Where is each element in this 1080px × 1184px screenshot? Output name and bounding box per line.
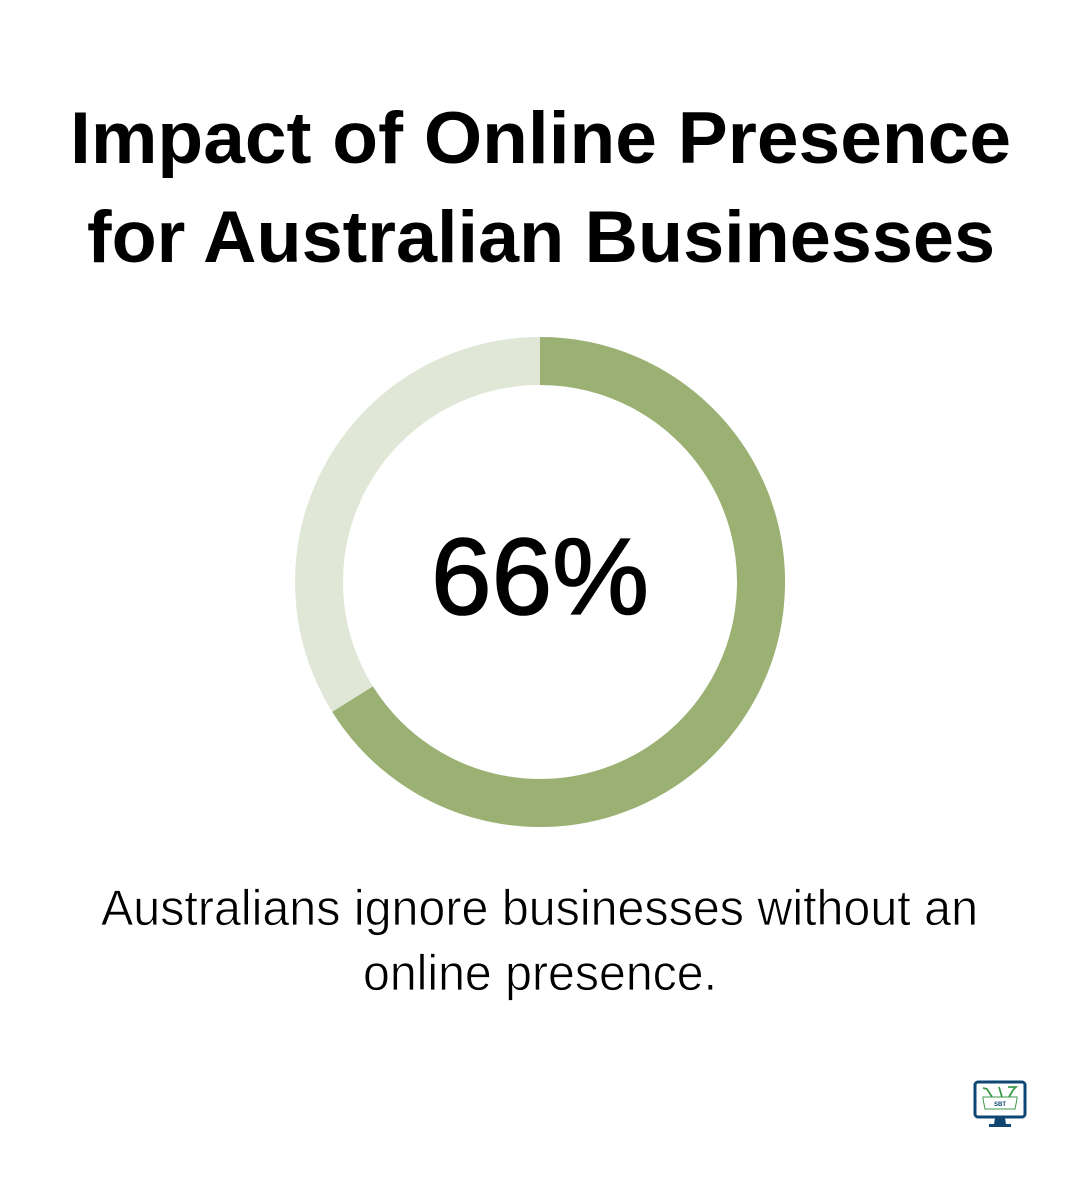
title [70, 98, 1011, 278]
donut chart: 66% [319, 361, 761, 803]
caption: Australians ignore businesses without an [101, 880, 978, 936]
icon: SBT monitor logo: SBT [994, 1102, 1006, 1108]
caption [101, 880, 978, 1001]
title: Impact of Online Presence [70, 98, 1011, 179]
icon: SBT monitor logo [975, 1082, 1025, 1127]
big number: 66% [431, 516, 649, 638]
title: for Australian Businesses [87, 197, 995, 278]
caption: online presence. [363, 945, 717, 1001]
